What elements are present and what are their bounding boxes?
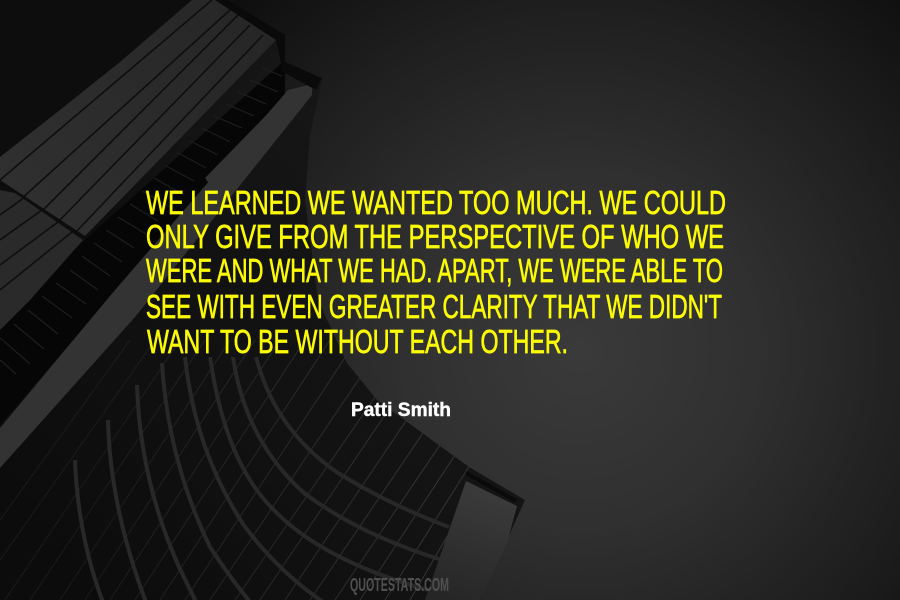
dark roof cap (215, 0, 322, 90)
facade window grid (0, 340, 480, 600)
quote line 5: WANT TO BE WITHOUT EACH OTHER. (147, 323, 568, 360)
facade (0, 80, 525, 600)
watermark: QUOTESTATS.COM (350, 575, 449, 595)
gray end panel (425, 481, 517, 600)
facade curved ribs (75, 357, 449, 600)
gray band (0, 84, 312, 468)
author name: Patti Smith (351, 400, 451, 421)
lower left roof (0, 190, 83, 330)
quote text (146, 184, 726, 360)
panel top edge (466, 473, 516, 501)
key slats (0, 68, 282, 374)
building illustration (0, 0, 525, 600)
dark key band (0, 60, 285, 425)
thin key rail (205, 96, 288, 185)
main roof with slats (0, 0, 276, 236)
